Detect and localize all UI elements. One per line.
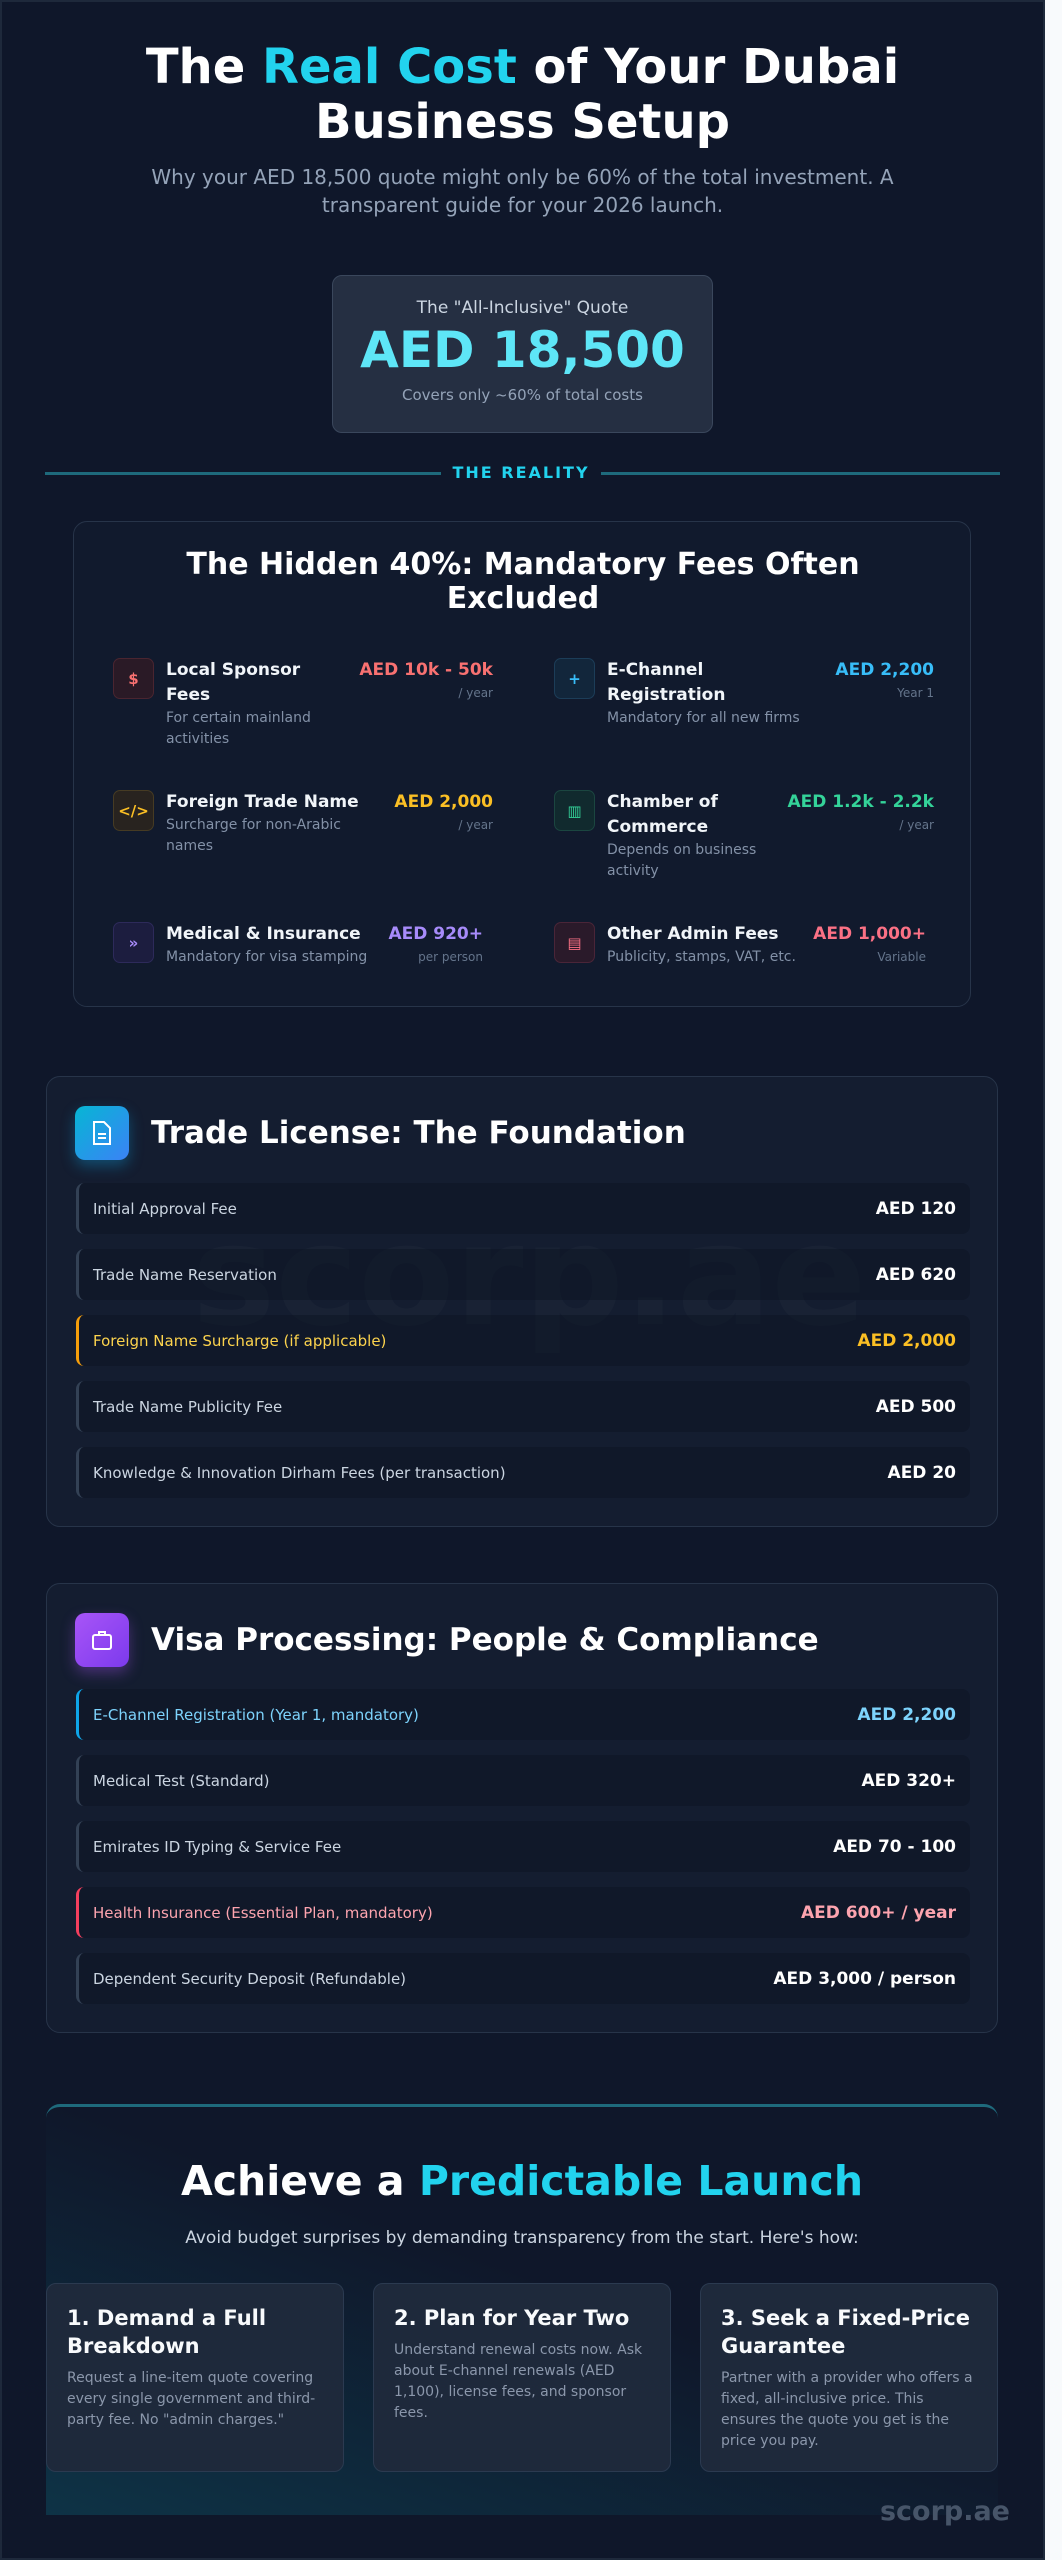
row: AED 70 - 100 [833,1836,956,1856]
item: local sponsor: Local Sponsor Fees [166,660,300,705]
item: foreign trade name [113,790,493,854]
row: e-channel: AED 2,200 [857,1704,956,1724]
divider: the reality: THE REALITY [452,463,590,482]
card 2: Understand renewal costs now. Ask about E-channel renewals (AED 1,100), license fees, and sponsor fees. [394,2342,642,2421]
item: e-channel: + [568,670,581,688]
item: medical [113,922,483,965]
card 3 [700,2283,998,2472]
item: foreign trade name: Foreign Trade Name [166,792,359,812]
watermark: scorp.ae [192,1195,866,1358]
row: AED 120 [876,1198,956,1218]
item: admin: Publicity, stamps, VAT, etc. [607,949,796,965]
item: local sponsor: For certain mainland activities [166,710,311,747]
row: AED 320+ [861,1770,956,1790]
item: chamber: Depends on business activity [607,842,756,879]
item: local sponsor [113,658,494,747]
title: Business Setup [315,94,730,150]
item: admin [554,922,926,965]
row [76,1755,970,1806]
row: Dependent Security Deposit (Refundable) [93,1970,406,1988]
card 1 [46,2283,344,2472]
row: Initial Approval Fee [93,1200,237,1218]
icon: document [75,1106,129,1160]
row: health [76,1887,970,1938]
row: highlighted [76,1315,970,1366]
item: e-channel [554,658,934,726]
title [146,39,899,150]
item: foreign trade name: AED 2,000 [394,792,493,812]
quote box: Covers only ~60% of total costs [402,386,643,404]
row: AED 620 [876,1264,956,1284]
item: medical: AED 920+ [388,924,483,944]
title: The Real Cost of Your Dubai [146,39,899,95]
card 2: 2. Plan for Year Two [394,2306,629,2330]
row: highlighted: Foreign Name Surcharge (if applicable) [93,1332,386,1350]
panel: hidden 40% [73,521,971,1007]
item: foreign trade name: </> [118,802,149,820]
item: admin: Other Admin Fees [607,924,779,944]
row: Medical Test (Standard) [93,1772,269,1790]
item: chamber: AED 1.2k - 2.2k [787,792,934,812]
heading: The Hidden 40%: Mandatory Fees Often [186,547,860,582]
item: e-channel: Mandatory for all new firms [607,710,800,726]
row [76,1447,970,1498]
row: Trade Name Reservation [93,1266,277,1284]
row: e-channel: E-Channel Registration (Year 1, mandatory) [93,1706,419,1724]
panel: trade license [46,1076,998,1527]
card 3: Partner with a provider who offers a fixed, all-inclusive price. This ensures the quote you get is the price you pay. [721,2370,973,2449]
item: foreign trade name: / year [458,818,493,832]
section: predictable launch [46,2104,998,2515]
item: local sponsor: $ [128,670,139,688]
item: chamber: Chamber of Commerce [607,792,718,837]
brand mark: scorp.ae [880,2496,1010,2527]
row: highlighted: AED 2,000 [857,1330,956,1350]
item: chamber: / year [899,818,934,832]
row: AED 3,000 / person [773,1968,956,1988]
row [76,1821,970,1872]
row: Emirates ID Typing & Service Fee [93,1838,341,1856]
heading: Excluded [447,581,599,616]
item: admin: ▤ [567,934,582,952]
item: local sponsor: / year [458,686,493,700]
quote box [332,275,713,433]
heading: Achieve a Predictable Launch [181,2157,863,2205]
quote box: AED 18,500 [360,321,685,379]
card 3: 3. Seek a Fixed-Price Guarantee [721,2306,970,2358]
item: e-channel: Year 1 [897,686,934,700]
row: AED 20 [888,1462,956,1482]
divider: the reality [45,463,1000,482]
row [76,1953,970,2004]
quote box: The "All-Inclusive" Quote [417,298,628,318]
item: chamber [554,790,934,879]
item: chamber: ▥ [567,802,582,820]
panel: visa [46,1583,998,2033]
subtitle: Why your AED 18,500 quote might only be 60% of the total investment. A transparent guide for your 2026 launch. [151,165,894,217]
heading: Visa Processing: People & Compliance [151,1622,819,1658]
row [76,1249,970,1300]
card 1: 1. Demand a Full Breakdown [67,2306,266,2358]
item: local sponsor: AED 10k - 50k [359,660,493,680]
item: admin: Variable [877,950,926,964]
card 1: Request a line-item quote covering every single government and third-party fee. No "admin charges." [67,2370,315,2428]
subtitle: Avoid budget surprises by demanding transparency from the start. Here's how: [185,2228,859,2248]
row: AED 500 [876,1396,956,1416]
card 2 [373,2283,671,2472]
heading: Trade License: The Foundation [151,1115,686,1151]
row: health: Health Insurance (Essential Plan, mandatory) [93,1904,433,1922]
item: foreign trade name: Surcharge for non-Arabic names [166,817,341,854]
item: admin: AED 1,000+ [813,924,926,944]
row [76,1183,970,1234]
item: e-channel: AED 2,200 [835,660,934,680]
item: medical: per person [418,950,483,964]
row [76,1381,970,1432]
icon: briefcase [75,1613,129,1667]
heading [186,547,860,616]
row: health: AED 600+ / year [801,1902,956,1922]
item: medical: » [129,934,138,952]
item: medical: Mandatory for visa stamping [166,949,367,965]
row: Trade Name Publicity Fee [93,1398,282,1416]
item: e-channel: E-Channel Registration [607,660,725,705]
row: e-channel [76,1689,970,1740]
row: Knowledge & Innovation Dirham Fees (per transaction) [93,1464,506,1482]
item: medical: Medical & Insurance [166,924,361,944]
